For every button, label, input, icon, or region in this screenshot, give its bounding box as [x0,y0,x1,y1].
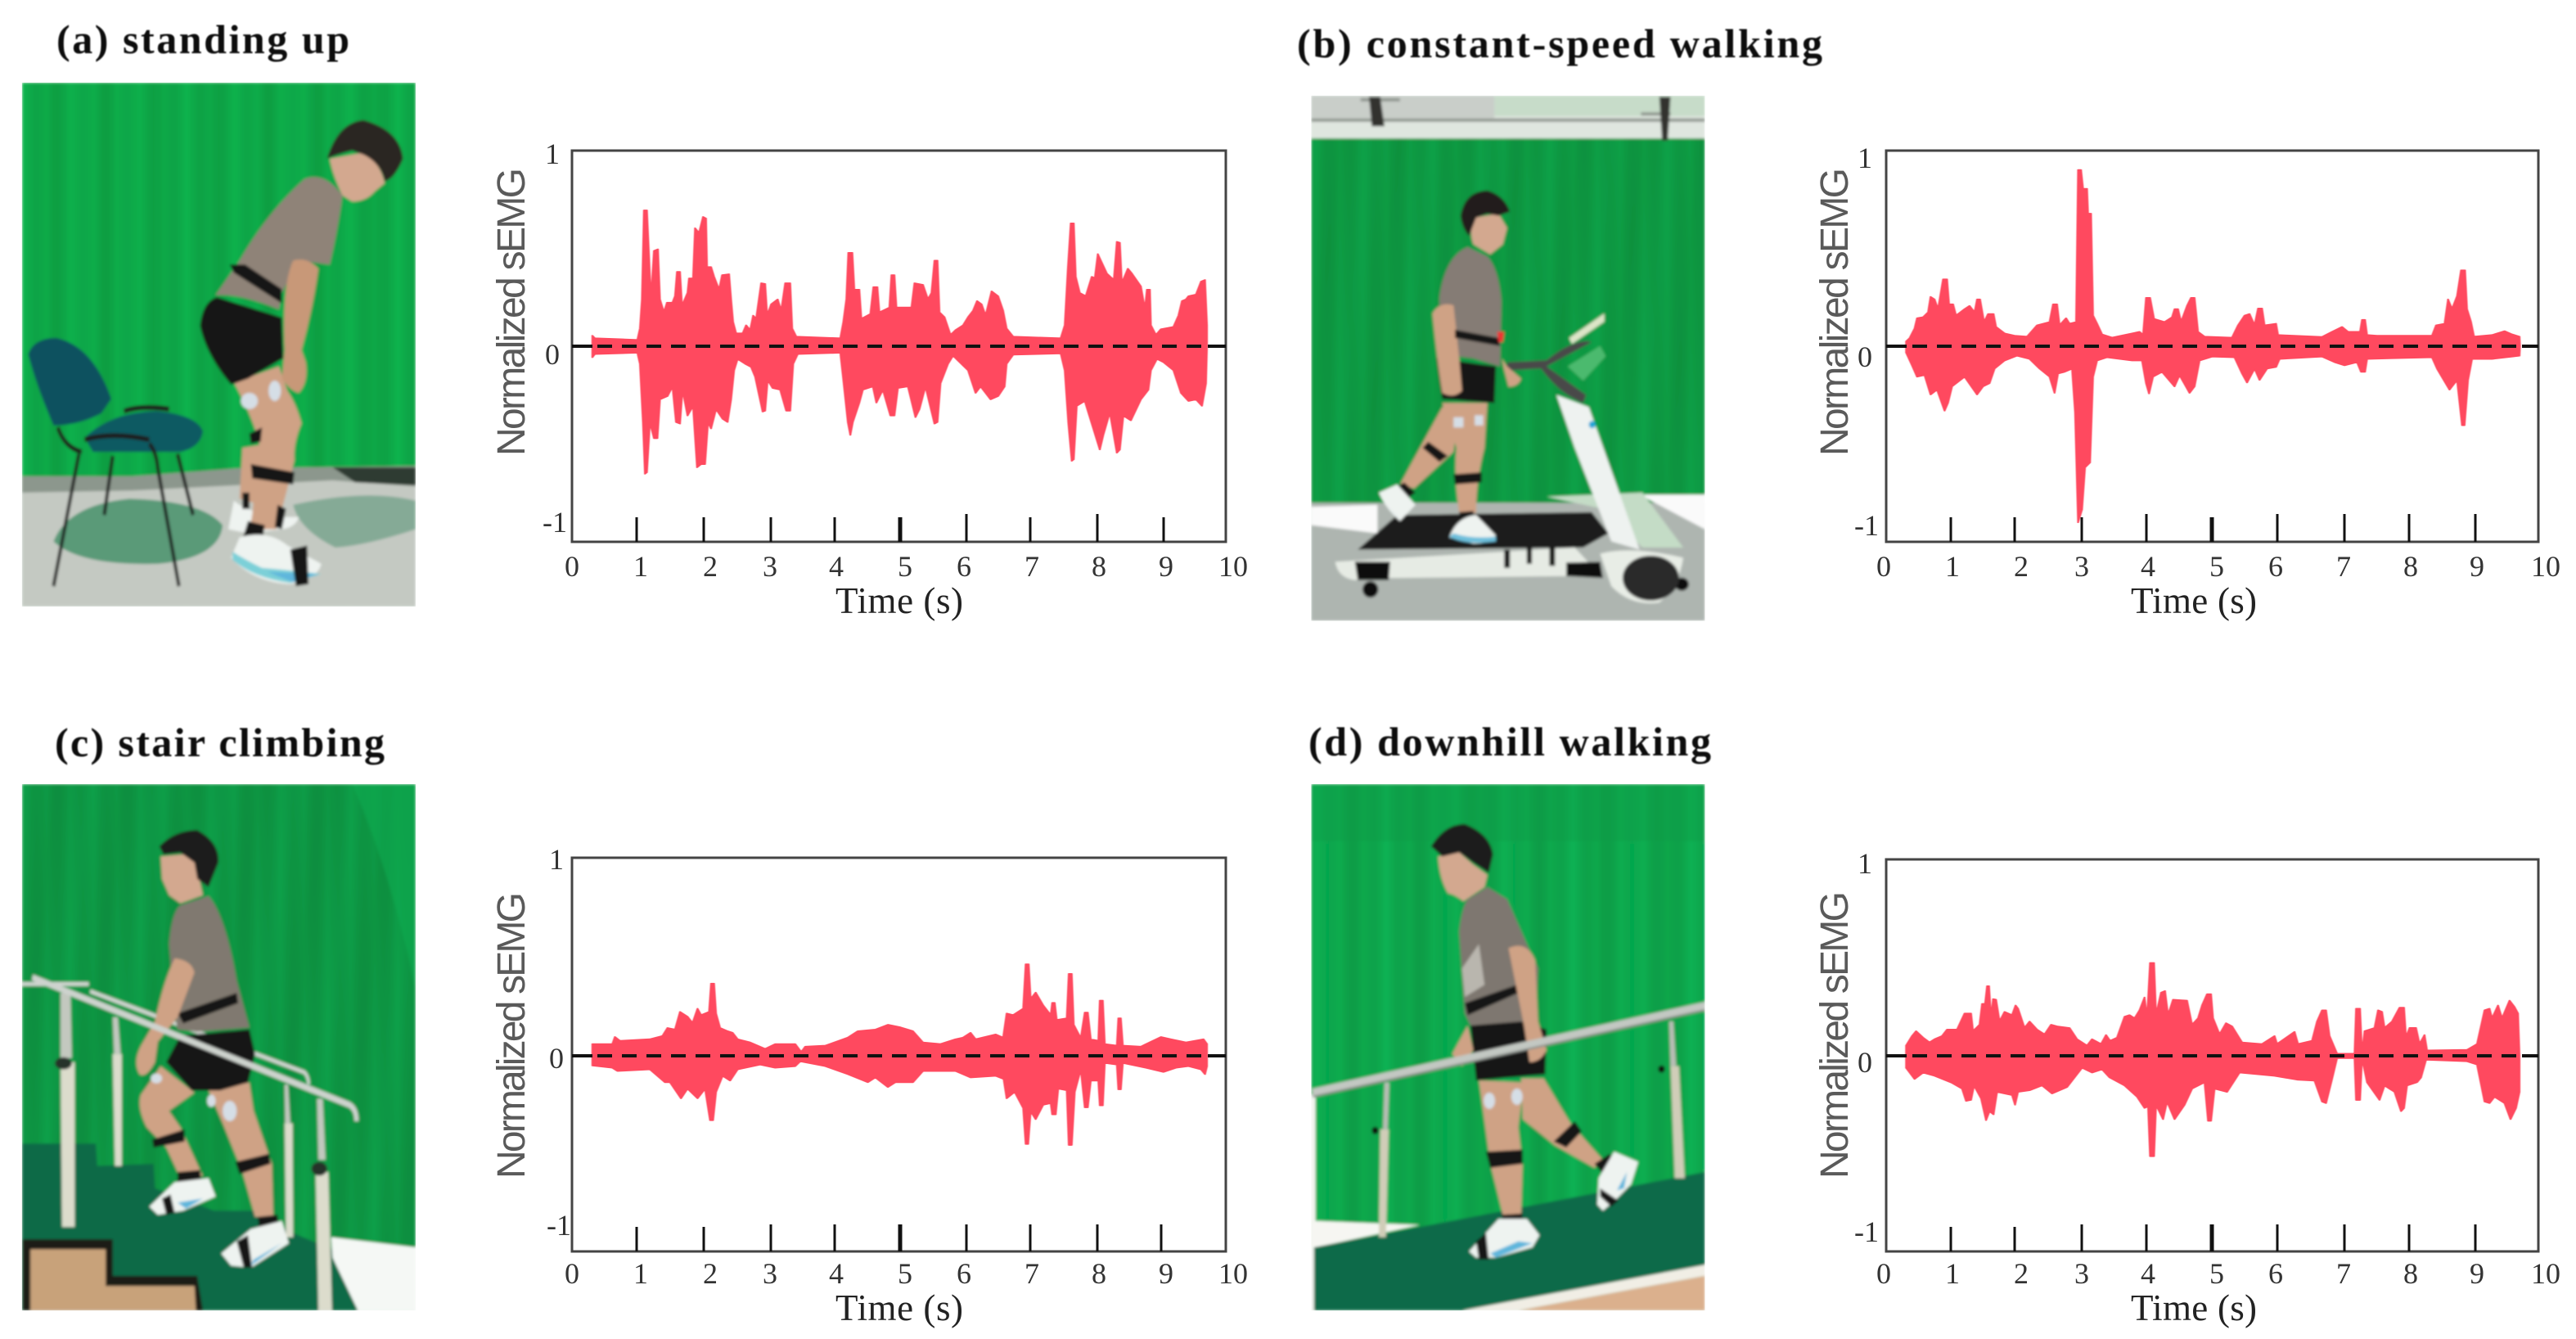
x tick labels: 5 [898,550,912,583]
x tick labels: 10 [2531,550,2560,583]
x tick labels [1876,550,2560,583]
x tick labels: 1 [1945,1257,1960,1290]
x tick labels: 0 [565,550,579,583]
x tick labels: 3 [2074,550,2089,583]
y tick labels: 0 [1858,340,1872,373]
y axis title: Normalized sEMG [1813,891,1857,1179]
chart: standing up sEMG [490,138,1248,621]
y tick labels: -1 [1854,509,1879,542]
x tick labels: 3 [763,1257,777,1290]
x tick labels: 7 [1025,550,1039,583]
x tick labels: 8 [2403,550,2418,583]
y tick labels: 0 [549,1042,564,1075]
x tick labels: 6 [957,550,971,583]
chart: constant-speed walking sEMG [1813,142,2560,621]
y axis title: Normalized sEMG [490,168,534,456]
x tick labels: 9 [2470,1257,2484,1290]
x tick labels: 4 [829,550,844,583]
x tick labels: 1 [633,550,648,583]
y tick labels: 1 [1858,847,1872,880]
x tick labels [1876,1257,2560,1290]
x tick labels [565,550,1248,583]
y tick labels: -1 [547,1209,571,1242]
y tick labels: 1 [1858,142,1872,174]
y tick labels: 1 [549,843,564,876]
x tick labels: 1 [1945,550,1960,583]
title: (c) stair climbing: (c) stair climbing [55,719,385,765]
x tick labels: 7 [1025,1257,1039,1290]
photo: person rising from chair in front of green screen [22,83,416,606]
y axis title: Normalized sEMG [1813,168,1857,456]
x axis title: Time (s) [2131,580,2257,621]
x tick labels: 6 [2268,1257,2283,1290]
y tick labels [1854,847,1879,1248]
x tick labels: 7 [2336,1257,2351,1290]
chart: stair climbing sEMG [490,843,1248,1328]
title: (d) downhill walking: (d) downhill walking [1308,719,1711,764]
photo: person walking on treadmill [1311,96,1705,621]
x tick labels: 2 [703,550,718,583]
x tick labels: 1 [633,1257,648,1290]
x tick labels: 10 [1218,1257,1248,1290]
x tick labels: 5 [2209,1257,2224,1290]
x tick labels: 4 [2141,550,2155,583]
waveform [1906,169,2520,522]
x tick labels: 9 [2470,550,2484,583]
x tick labels: 8 [1092,1257,1106,1290]
x tick labels: 10 [1218,550,1248,583]
x tick labels: 0 [1876,1257,1891,1290]
x tick labels: 6 [2268,550,2283,583]
x tick labels: 2 [2014,1257,2029,1290]
x tick labels: 8 [2403,1257,2418,1290]
y tick labels: -1 [1854,1215,1879,1248]
x tick labels: 0 [565,1257,579,1290]
x tick labels: 2 [2014,550,2029,583]
x tick labels: 0 [1876,550,1891,583]
title: (a) standing up: (a) standing up [56,16,349,62]
waveform [592,210,1207,474]
y axis title: Normalized sEMG [490,892,534,1179]
y tick labels [547,843,571,1242]
chart: downhill walking sEMG [1813,847,2560,1328]
y tick labels: 1 [545,138,560,170]
waveform [1906,963,2520,1156]
waveform [592,964,1207,1145]
x tick labels: 3 [2074,1257,2089,1290]
y tick labels [543,138,567,539]
x tick labels: 7 [2336,550,2351,583]
x axis title: Time (s) [2131,1287,2257,1328]
x tick labels: 8 [1092,550,1106,583]
x tick labels: 10 [2531,1257,2560,1290]
y tick labels: 0 [545,338,560,371]
x tick labels: 2 [703,1257,718,1290]
x tick labels [565,1257,1248,1290]
x axis title: Time (s) [835,580,963,621]
x tick labels: 4 [829,1257,844,1290]
y tick labels: -1 [543,506,567,539]
photo: person walking down a ramp with handrail [1311,784,1705,1310]
y tick labels: 0 [1858,1046,1872,1079]
x tick labels: 3 [763,550,777,583]
x tick labels: 5 [898,1257,912,1290]
photo: person climbing stairs with handrails [22,784,416,1310]
x tick labels: 9 [1159,1257,1173,1290]
title: (b) constant-speed walking: (b) constant-speed walking [1297,20,1822,66]
x tick labels: 6 [957,1257,971,1290]
x tick labels: 4 [2141,1257,2155,1290]
x tick labels: 9 [1159,550,1173,583]
y tick labels [1854,142,1879,542]
x tick labels: 5 [2209,550,2224,583]
x axis title: Time (s) [835,1287,963,1328]
